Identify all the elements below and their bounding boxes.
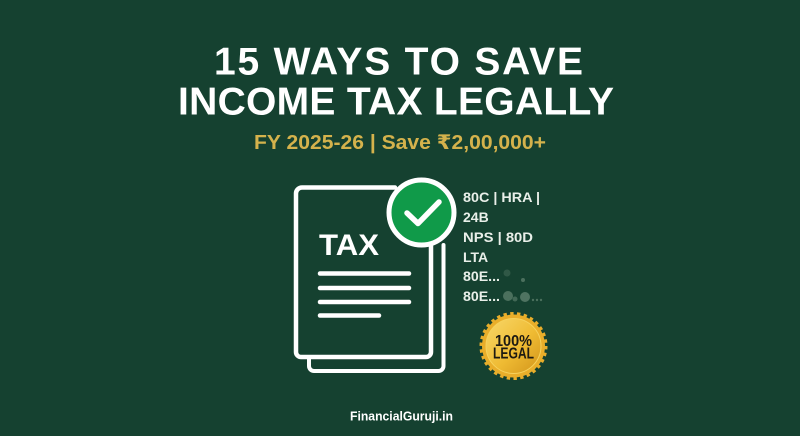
section list: LTA xyxy=(463,249,488,265)
back page xyxy=(309,245,444,371)
icon: green check badge xyxy=(389,180,454,245)
seal text xyxy=(493,333,534,362)
section list: 80E... xyxy=(463,288,500,304)
section list: 24B xyxy=(463,209,489,225)
seal text: LEGAL xyxy=(493,346,534,362)
footer website: FinancialGuruji.in xyxy=(350,408,453,424)
seal text: 100% xyxy=(495,333,532,350)
section list: NPS | 80D xyxy=(463,229,533,245)
title xyxy=(178,40,614,124)
icon: tax document xyxy=(296,188,444,371)
title: 15 WAYS TO SAVE xyxy=(214,40,583,84)
faded dots xyxy=(503,270,542,302)
document label: TAX xyxy=(319,229,379,262)
section list: 80C | HRA | xyxy=(463,189,540,205)
text lines xyxy=(320,274,409,316)
section list: 80E... xyxy=(463,268,500,284)
front page xyxy=(296,188,431,357)
subtitle: FY 2025-26 | Save ₹2,00,000+ xyxy=(254,132,546,154)
title: INCOME TAX LEGALLY xyxy=(178,80,614,124)
badge: 100% legal seal xyxy=(481,314,546,378)
section list xyxy=(463,189,540,304)
